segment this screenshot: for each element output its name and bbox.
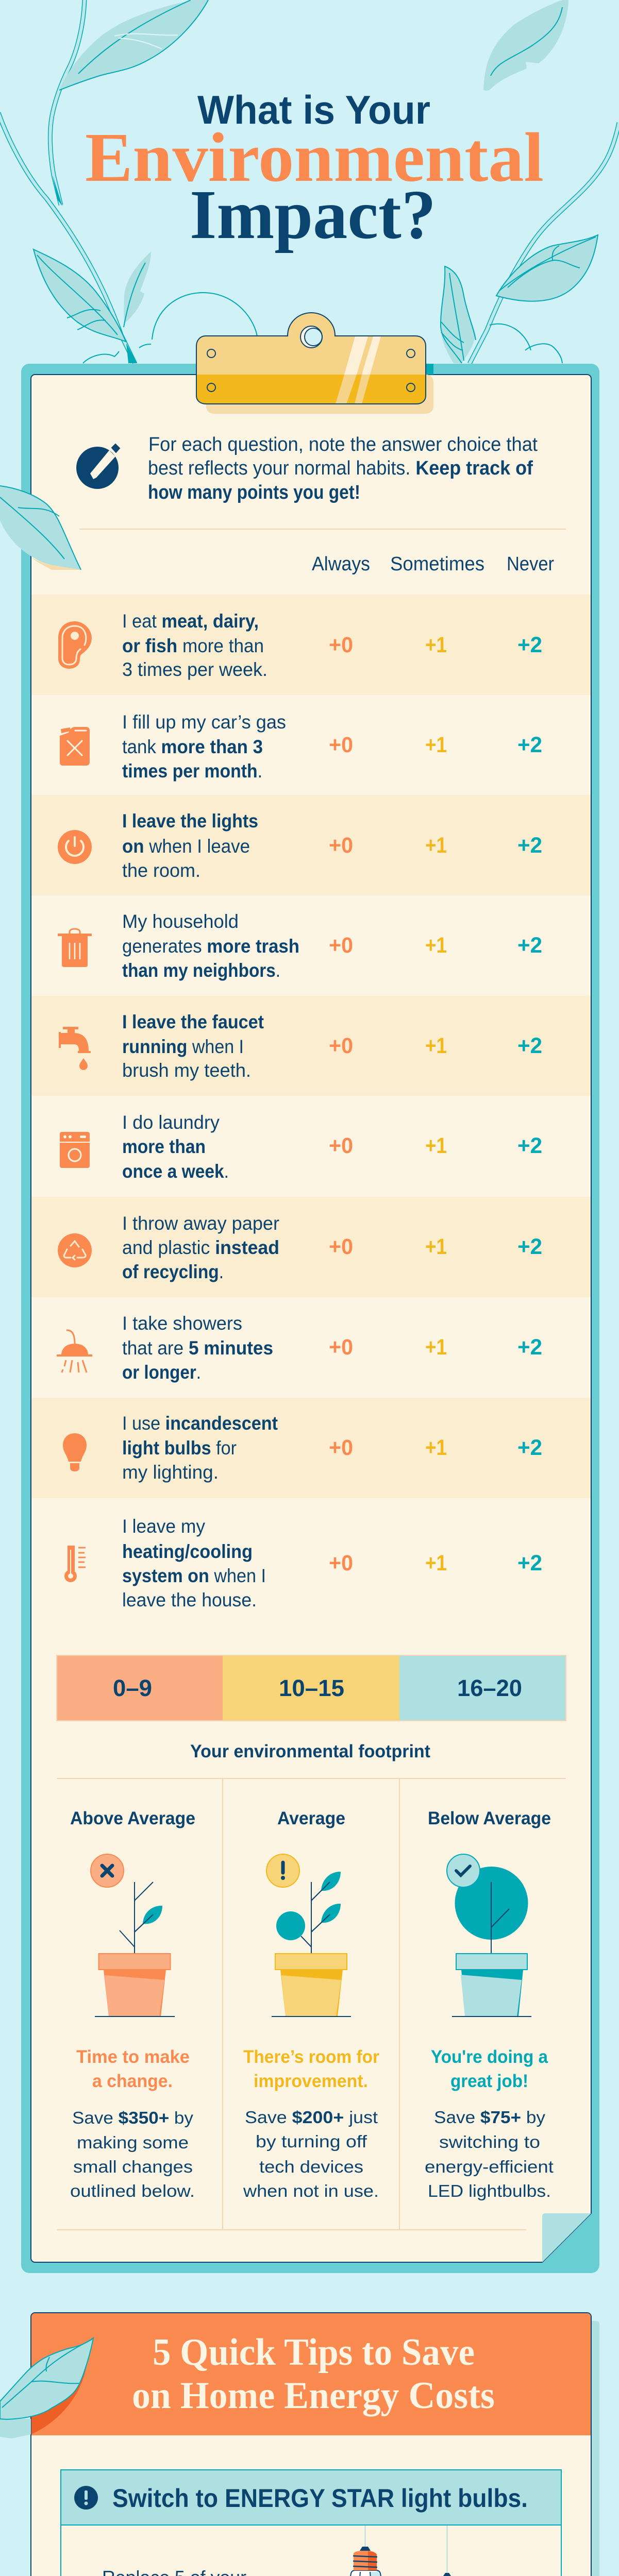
result column: below average: Below Average: [428, 1808, 551, 1828]
question 10: heating: system on when I: [122, 1565, 266, 1586]
icon: power button: [58, 830, 92, 864]
icon: faucet: [59, 1027, 91, 1070]
question 4: trash: My household: [122, 911, 239, 932]
clipboard clip: [196, 313, 433, 414]
row backgrounds: [31, 595, 591, 1498]
result column: above average: Above Average: [70, 1808, 195, 1828]
icon: trash can: [58, 929, 92, 967]
icon: plant in yellow pot: [266, 1854, 351, 2016]
tip 1: ENERGY STAR bulbs: [61, 2470, 561, 2576]
question 6: laundry: +2: [517, 1133, 542, 1158]
question 5: faucet: I leave the faucet: [122, 1011, 264, 1032]
question 9: light bulbs: [63, 1413, 542, 1483]
icon: plant in teal pot: [447, 1854, 531, 2016]
question 1: meat: 3 times per week.: [122, 659, 267, 680]
question 7: recycling: +2: [517, 1234, 542, 1259]
question 4: trash: +2: [517, 933, 542, 958]
result column: above average: Time to make: [76, 2047, 190, 2067]
illustration: left plant stems and leaves: [0, 0, 257, 364]
column headers: [312, 553, 554, 575]
question 10: heating: +0: [329, 1551, 353, 1575]
question 9: light bulbs: I use incandescent: [122, 1413, 278, 1434]
panel: energy tips: [0, 2313, 599, 2576]
result column: above average: [70, 1808, 195, 2200]
tips heading: on Home Energy Costs: [132, 2375, 495, 2417]
question 6: laundry: [60, 1112, 542, 1182]
panel: clipboard quiz: [21, 364, 599, 2273]
result column: average: tech devices: [259, 2157, 363, 2176]
icon: gas can: [60, 727, 90, 766]
question 7: recycling: +1: [425, 1234, 447, 1259]
question 9: light bulbs: light bulbs for: [122, 1437, 237, 1459]
tip 1 heading: [61, 2470, 561, 2525]
tips heading: [132, 2331, 495, 2417]
question 5: faucet: [59, 1011, 542, 1081]
question 7: recycling: I throw away paper: [122, 1213, 279, 1234]
question 3: lights: the room.: [122, 860, 200, 881]
question 2: gas: I fill up my car’s gas: [122, 711, 286, 733]
question 6: laundry: once a week.: [122, 1161, 229, 1182]
tip boxes outline: [61, 2470, 561, 2576]
intro text: how many points you get!: [148, 482, 360, 503]
question 5: faucet: brush my teeth.: [122, 1060, 251, 1081]
question 8: showers: or longer.: [122, 1362, 201, 1383]
question 1: meat: I eat meat, dairy,: [122, 611, 259, 632]
question 4: trash: than my neighbors.: [122, 960, 280, 981]
tip 1 heading: Switch to ENERGY STAR light bulbs.: [112, 2484, 528, 2513]
title: What is Your: [197, 87, 430, 132]
result column: average: There’s room for: [243, 2047, 379, 2067]
question 3: lights: +0: [329, 833, 353, 858]
question 7: recycling: +0: [329, 1234, 353, 1259]
question 9: light bulbs: +2: [517, 1435, 542, 1460]
question 7: recycling: of recycling.: [122, 1261, 224, 1282]
question 2: gas: +2: [517, 733, 542, 757]
result column: above average: small changes: [73, 2157, 193, 2176]
question 3: lights: on when I leave: [122, 836, 250, 857]
question 6: laundry: +0: [329, 1133, 353, 1158]
column headers: Always: [312, 553, 370, 575]
question 8: showers: I take showers: [122, 1313, 242, 1334]
column headers: Never: [507, 553, 554, 575]
question 5: faucet: +1: [425, 1033, 447, 1058]
icon: thermometer: [64, 1546, 86, 1582]
score bar: [57, 1655, 566, 1721]
score bar: 10–15: [279, 1675, 344, 1701]
illustration: right plant stems and leaves: [441, 0, 619, 364]
question 10: heating: I leave my: [122, 1516, 205, 1537]
question 10: heating: leave the house.: [122, 1589, 257, 1611]
question 4: trash: +1: [425, 933, 447, 958]
title: Environmental: [85, 119, 544, 196]
question 1: meat: +2: [517, 633, 542, 657]
question 3: lights: +1: [425, 833, 447, 858]
question 8: showers: that are 5 minutes: [122, 1337, 273, 1359]
question 1: meat: [58, 611, 542, 680]
question 7: recycling: and plastic instead: [122, 1237, 279, 1258]
question 9: light bulbs: +1: [425, 1435, 447, 1460]
question 1: meat: +1: [425, 633, 447, 657]
tips header band: [0, 2313, 591, 2438]
question 10: heating: +2: [517, 1551, 542, 1575]
result column: below average: switching to: [439, 2132, 540, 2151]
question 4: trash: generates more trash: [122, 936, 299, 957]
score bar: 0–9: [113, 1675, 152, 1701]
question 6: laundry: more than: [122, 1136, 206, 1157]
column headers: Sometimes: [390, 553, 484, 575]
question 8: showers: +1: [425, 1335, 447, 1360]
question 4: trash: +0: [329, 933, 353, 958]
question 9: light bulbs: my lighting.: [122, 1462, 219, 1483]
result column: below average: [425, 1808, 554, 2200]
illustration: hanging light bulbs: [306, 2526, 561, 2576]
question 5: faucet: +0: [329, 1033, 353, 1058]
result column: average: when not in use.: [243, 2181, 379, 2200]
question 2: gas: tank more than 3: [122, 736, 263, 757]
result column: below average: great job!: [450, 2071, 528, 2091]
question 2: gas: +0: [329, 733, 353, 757]
question 2: gas: times per month.: [122, 760, 262, 782]
result column: average: by turning off: [256, 2132, 367, 2151]
question 10: heating: +1: [425, 1551, 447, 1575]
score bar: 16–20: [457, 1675, 522, 1701]
question 6: laundry: I do laundry: [122, 1112, 220, 1133]
result column: average: Save $200+ just: [245, 2108, 378, 2127]
icon: shower: [57, 1330, 92, 1372]
question 5: faucet: running when I: [122, 1036, 244, 1057]
question 1: meat: or fish more than: [122, 635, 264, 656]
intro text: For each question, note the answer choice that: [148, 434, 538, 455]
icon: bulb: [63, 1433, 87, 1471]
question 8: showers: +2: [517, 1335, 542, 1360]
question 5: faucet: +2: [517, 1033, 542, 1058]
result column: average: improvement.: [254, 2071, 368, 2091]
result column: above average: a change.: [92, 2071, 173, 2091]
question 10: heating: heating/cooling: [122, 1541, 253, 1562]
question 2: gas: [60, 711, 542, 782]
question 10: heating: [64, 1516, 542, 1611]
result column: below average: You're doing a: [431, 2047, 548, 2067]
title: Impact?: [190, 176, 436, 253]
question 3: lights: +2: [517, 833, 542, 858]
question 4: trash: [58, 911, 542, 981]
icon: washing machine: [60, 1132, 90, 1168]
result column: average: [243, 1808, 379, 2200]
intro text: [148, 434, 538, 503]
icon: recycle: [58, 1233, 92, 1267]
question 1: meat: +0: [329, 633, 353, 657]
leaf over clipboard: [0, 486, 81, 570]
result column: above average: Save $350+ by: [72, 2108, 194, 2127]
question 7: recycling: [58, 1213, 542, 1282]
result column: below average: LED lightbulbs.: [428, 2181, 551, 2200]
question 3: lights: [58, 810, 542, 881]
intro icon: pencil: [76, 444, 120, 489]
title: [85, 87, 544, 253]
result column: average: Average: [277, 1808, 345, 1828]
result column: above average: making some: [77, 2133, 189, 2152]
paper fold corner: [542, 2213, 591, 2262]
question 3: lights: I leave the lights: [122, 810, 258, 832]
question 8: showers: [57, 1313, 542, 1383]
question 8: showers: +0: [329, 1335, 353, 1360]
footprint heading: Your environmental footprint: [190, 1741, 430, 1761]
question 2: gas: +1: [425, 733, 447, 757]
tips heading: 5 Quick Tips to Save: [153, 2331, 475, 2374]
intro text: best reflects your normal habits. Keep track of: [148, 457, 533, 479]
icon: plant in orange pot: [91, 1854, 175, 2016]
question 6: laundry: +1: [425, 1133, 447, 1158]
result column: below average: Save $75+ by: [434, 2108, 546, 2127]
icon: leaf on header: [0, 2338, 93, 2438]
result column: below average: energy-efficient: [425, 2157, 554, 2176]
question 9: light bulbs: +0: [329, 1435, 353, 1460]
result column: above average: outlined below.: [70, 2181, 195, 2200]
icon: meat: [58, 621, 92, 669]
